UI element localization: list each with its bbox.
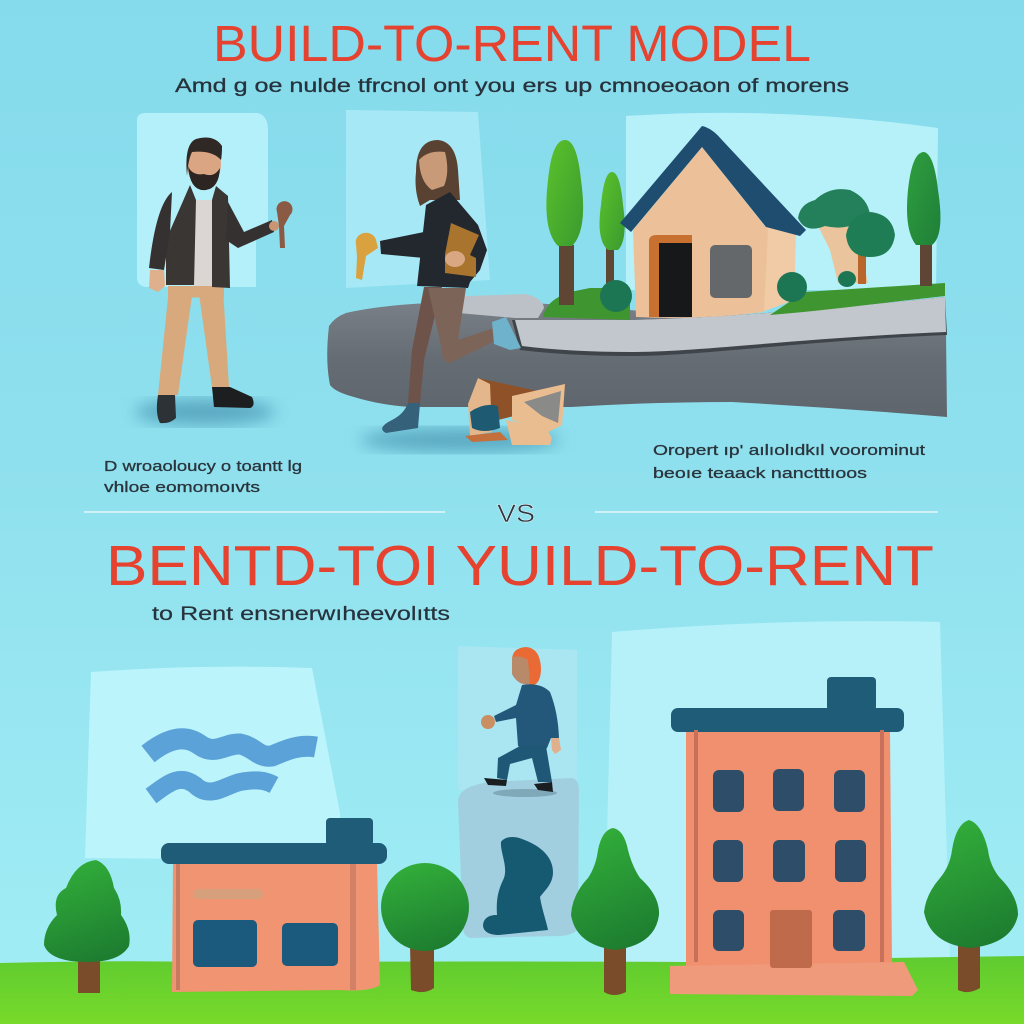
plinth	[512, 297, 947, 356]
head	[419, 152, 447, 190]
head	[187, 141, 221, 187]
road	[327, 302, 947, 417]
window	[710, 245, 752, 298]
shirt	[194, 200, 213, 294]
shoes	[492, 317, 521, 350]
small walking person	[481, 647, 561, 797]
hands	[149, 270, 165, 292]
caption right: beoıe teaack nanctttıoos	[653, 465, 867, 482]
divider	[84, 511, 938, 513]
light panels: bottom row	[85, 621, 950, 962]
caption right: Oropert ıp' aılıolıdkıl voorominut	[653, 442, 926, 459]
tall building	[670, 677, 918, 996]
shoes	[157, 395, 176, 423]
translucent pedestal	[458, 778, 579, 938]
back trees	[559, 245, 574, 305]
round tree	[381, 863, 469, 992]
arms	[149, 192, 172, 270]
shrubs	[600, 280, 632, 312]
tree far left	[44, 860, 130, 993]
centre tree	[571, 828, 659, 995]
jacket	[417, 192, 487, 288]
light panels: top row	[137, 110, 938, 290]
ground	[0, 956, 1024, 1024]
house walls	[633, 147, 768, 318]
caption left: vhloe eomomoıvts	[104, 479, 260, 496]
key	[356, 233, 378, 280]
lawn	[543, 288, 630, 320]
house side wall	[760, 225, 796, 312]
caption right	[653, 442, 926, 482]
hair	[416, 140, 460, 206]
second subtitle: to Rent ensnerwıheevolıtts	[152, 604, 450, 625]
person with key	[135, 138, 292, 425]
book	[445, 223, 479, 277]
caption left	[104, 458, 302, 496]
door	[649, 235, 692, 317]
subtitle: Amd g oe nulde tfrcnol ont you ers up cmnoeoaon of morens	[175, 76, 849, 97]
vs label: VS	[497, 500, 535, 528]
caption left: D wroaoloucy o toantt lg	[104, 458, 302, 475]
shadow	[493, 789, 557, 797]
front leg	[428, 288, 497, 363]
roof	[620, 126, 806, 236]
key	[276, 201, 292, 248]
hand	[445, 251, 465, 267]
back leg	[408, 287, 442, 403]
tree far right	[924, 820, 1018, 992]
open box	[465, 378, 565, 445]
legs	[158, 288, 192, 395]
person running with key	[356, 140, 560, 452]
jacket	[166, 185, 196, 285]
low building	[161, 818, 387, 992]
second heading: BENTD-TOI YUILD-TO-RENT	[106, 534, 934, 598]
house scene	[543, 126, 945, 320]
icon: blue waves	[148, 739, 316, 796]
title: BUILD-TO-RENT MODEL	[213, 15, 811, 72]
tree cottage	[818, 226, 868, 283]
curb	[440, 294, 544, 318]
